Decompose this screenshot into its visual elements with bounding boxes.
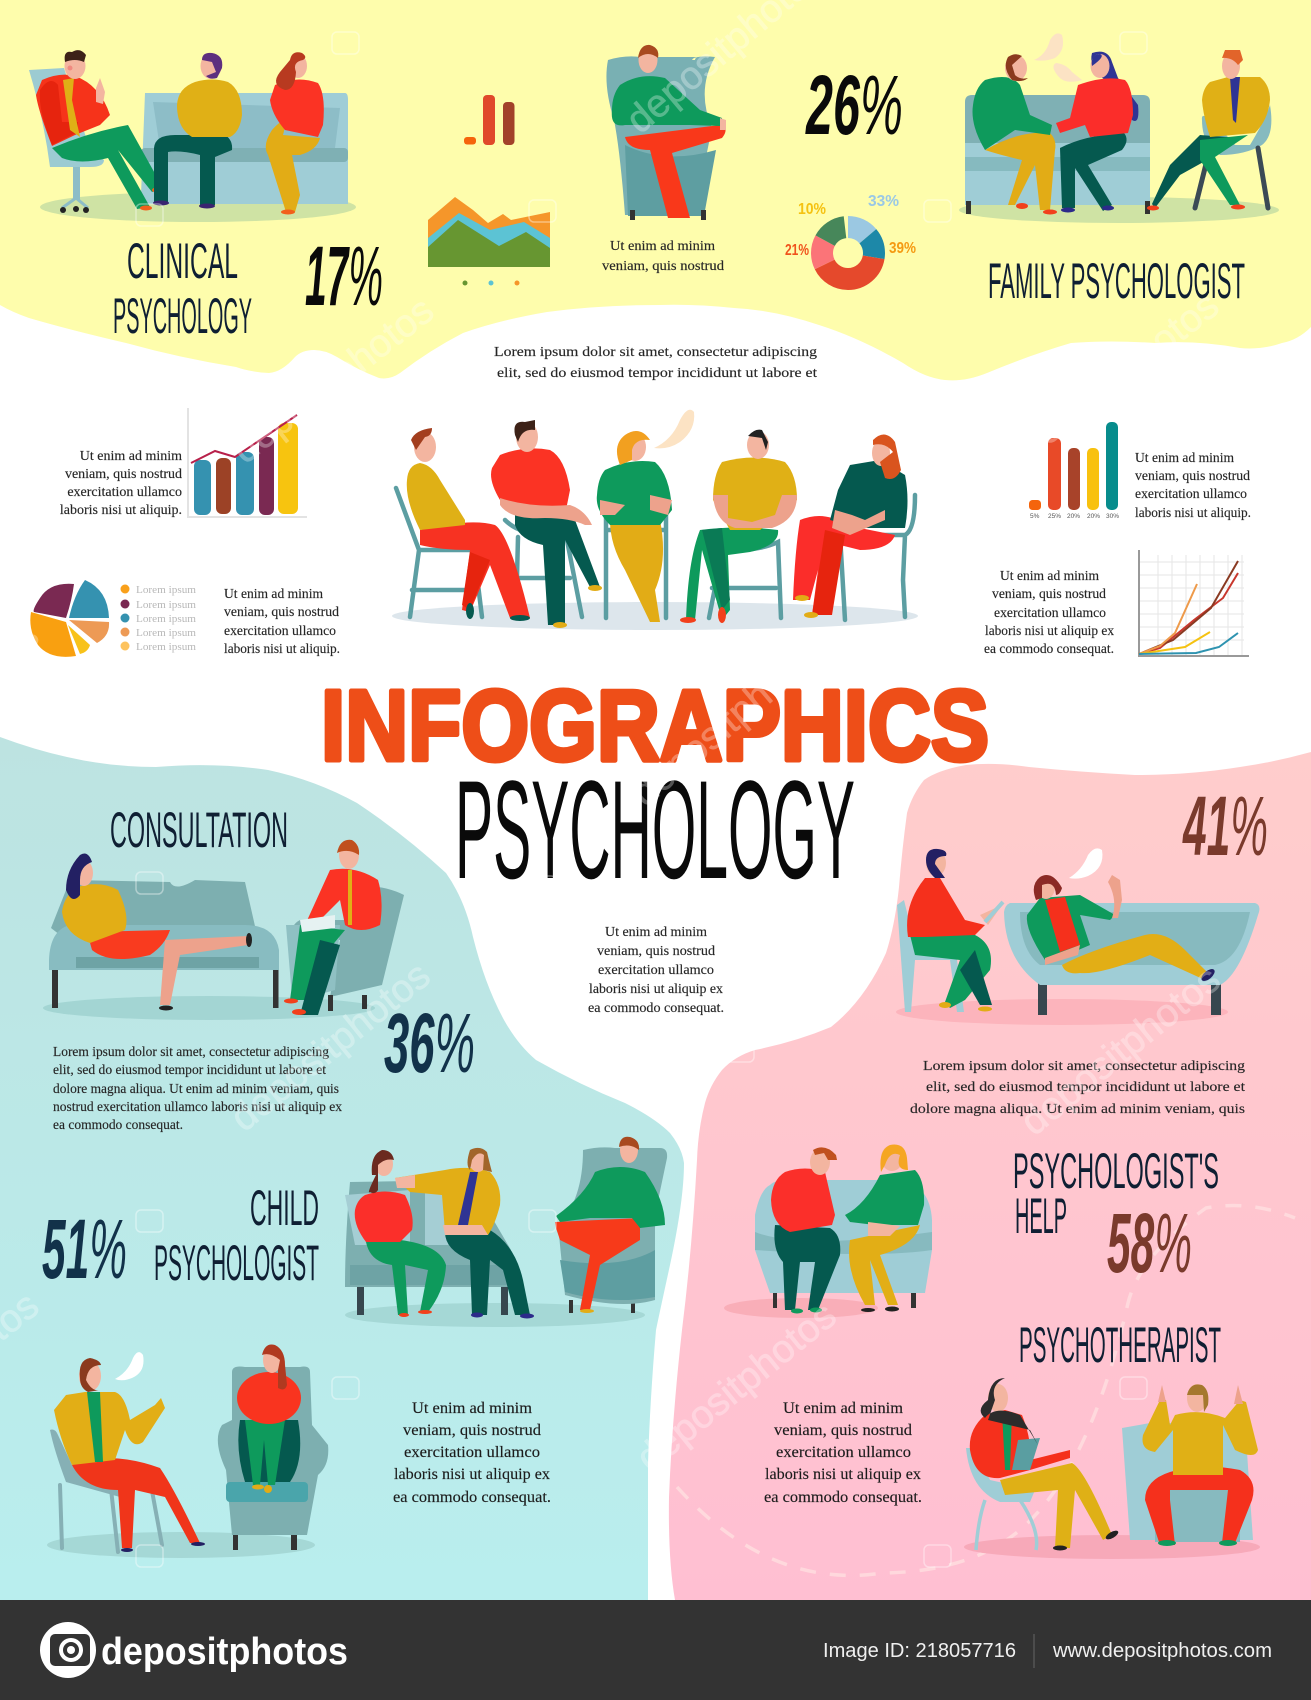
text: line chart caption: ea commodo consequat.	[984, 642, 1114, 657]
figure: man with raised hands	[1142, 1384, 1258, 1546]
icon: speech bubble	[115, 1352, 144, 1380]
text: pie caption: laboris nisi ut aliquip.	[224, 642, 340, 657]
chart: colored bars with percent labels: 5%	[1030, 513, 1040, 520]
figure: man in mustard sweater	[407, 428, 530, 621]
armchair	[286, 885, 404, 1011]
website: www.depositphotos.com	[1052, 1640, 1272, 1662]
figure: bald man in mustard shirt	[680, 430, 797, 623]
text: centre paragraph: laboris nisi ut aliquip ex	[589, 982, 723, 997]
caption: top centre: veniam, quis nostrud	[602, 259, 724, 274]
text: bottom-right paragraph: Ut enim ad minim	[783, 1400, 904, 1417]
text: centre paragraph: ea commodo consequat.	[588, 1001, 724, 1016]
sofa: light blue couch	[1004, 903, 1259, 1015]
watermarks: depositphotos: depositphotos	[1009, 284, 1227, 467]
armchair: grey teal	[218, 1367, 328, 1550]
text: bottom-right paragraph: laboris nisi ut aliquip ex	[765, 1466, 921, 1483]
stat: 26 percent: 26%	[805, 58, 903, 152]
text: pink lorem	[910, 1059, 1245, 1117]
text: pie caption: veniam, quis nostrud	[224, 605, 339, 620]
text: centre paragraph: veniam, quis nostrud	[597, 944, 715, 959]
watermarks: depositphotos: depositphotos	[223, 954, 438, 1140]
stat: 17 percent: 17%	[305, 229, 383, 323]
chart: colored bars with percent labels: 20%	[1087, 513, 1100, 520]
text: bottom-left paragraph: Ut enim ad minim	[412, 1400, 533, 1417]
panel: pink right background	[669, 752, 1311, 1600]
chart: colored bars with percent labels: 20%	[1067, 513, 1080, 520]
heading: child psychologist	[154, 1180, 319, 1291]
watermarks: depositphotos: depositphotos	[1013, 958, 1228, 1144]
chart: area chart	[428, 197, 550, 286]
chart: donut with percentages: 39%	[889, 240, 916, 257]
text: centre paragraph: exercitation ullamco	[598, 963, 714, 978]
scene: group therapy circle	[392, 410, 918, 630]
watermarks: depositphotos: depositphotos	[623, 626, 837, 815]
text: right bar caption: Ut enim ad minim	[1135, 451, 1234, 466]
scene: man in armchair	[606, 45, 726, 220]
chair: blue wooden	[897, 900, 964, 1012]
figure: bearded man gesturing	[54, 1358, 205, 1552]
chart: small bars	[464, 95, 514, 145]
text: pink lorem: dolore magna aliqua. Ut enim ad minim veniam, quis	[910, 1102, 1245, 1117]
scene: psychotherapist session	[964, 1378, 1260, 1559]
scene: therapist and patient on couch	[896, 848, 1259, 1025]
icon: speech bubble	[654, 410, 694, 448]
text: centre paragraph	[588, 925, 724, 1016]
figure: man with hand on chin	[1147, 50, 1270, 210]
legend: pie legend: Lorem ipsum	[136, 613, 196, 625]
text: right bar caption	[1135, 451, 1251, 521]
chair: grey blue	[50, 1430, 162, 1552]
text: consultation lorem: elit, sed do eiusmod tempor incididunt ut labore et	[53, 1063, 326, 1078]
text: line chart caption	[984, 569, 1114, 657]
text: pie caption: Ut enim ad minim	[224, 587, 323, 602]
text: bottom-left paragraph: laboris nisi ut aliquip ex	[394, 1466, 550, 1483]
logo: camera in circle	[40, 1622, 96, 1678]
stat: 41 percent: 41%	[1182, 779, 1268, 873]
figure: man in green	[612, 45, 726, 218]
chart: donut with percentages: 21%	[785, 242, 809, 259]
text: left bar chart caption: veniam, quis nostrud	[65, 467, 182, 482]
watermarks: depositphotos: depositphotos	[629, 1294, 844, 1480]
scene: consultation	[43, 840, 404, 1020]
text: pink lorem: Lorem ipsum dolor sit amet, consectetur adipiscing	[923, 1059, 1245, 1074]
chart: bars with rising line	[188, 408, 307, 517]
legend: pie legend: Lorem ipsum	[136, 599, 196, 611]
text: pink lorem: elit, sed do eiusmod tempor incididunt ut labore et	[926, 1080, 1245, 1095]
icons: speech bubbles	[1034, 33, 1082, 82]
figure: troubled man	[771, 1147, 840, 1314]
figure: bearded man in yellow	[153, 53, 242, 209]
text: right bar caption: laboris nisi ut aliquip.	[1135, 506, 1251, 521]
text: consultation lorem: dolore magna aliqua. Ut enim ad minim veniam, quis	[53, 1082, 339, 1097]
caption: top centre	[602, 239, 724, 274]
text: PSYCHOLOGIST	[154, 1235, 319, 1291]
text: line chart caption: veniam, quis nostrud	[992, 587, 1106, 602]
figure: woman in dark green	[793, 434, 908, 618]
text: centre paragraph: Ut enim ad minim	[605, 925, 707, 940]
stat: 36 percent: 36%	[384, 996, 475, 1090]
figure: woman hugging herself	[237, 1344, 301, 1493]
logo text: depositphotos	[101, 1631, 348, 1673]
text: line chart caption: exercitation ullamco	[994, 606, 1106, 621]
chairs	[396, 488, 915, 620]
armchair	[606, 56, 715, 215]
chart: colored bars with percent labels	[1029, 422, 1119, 520]
text: left bar chart caption: laboris nisi ut aliquip.	[60, 503, 182, 518]
chair: round blue	[1195, 105, 1271, 208]
text: right bar caption: veniam, quis nostrud	[1135, 469, 1250, 484]
figure: therapist with glasses	[36, 50, 166, 211]
legend: pie legend: Lorem ipsum	[136, 641, 196, 653]
watermarks: depositphotos: depositphotos	[224, 289, 442, 472]
text: consultation lorem: Lorem ipsum dolor sit amet, consectetur adipiscing	[53, 1045, 329, 1060]
figure: reclining patient	[1027, 875, 1217, 983]
figure: man in red sweater	[491, 420, 602, 628]
figure: comforting woman	[845, 1145, 924, 1312]
figure: therapist woman with clipboard	[970, 1378, 1120, 1550]
scene: family psychologist	[959, 33, 1279, 223]
figure: reclining woman	[62, 854, 252, 1010]
text: line chart caption: laboris nisi ut aliquip ex	[985, 624, 1114, 639]
text: pie caption: exercitation ullamco	[224, 624, 336, 639]
sofa: light blue	[755, 1180, 932, 1308]
scene: child psychologist	[345, 1137, 667, 1327]
legend: pie legend: Lorem ipsum	[136, 584, 196, 596]
text: bottom-right paragraph: exercitation ullamco	[776, 1444, 911, 1461]
text: bottom-right paragraph: ea commodo consequat.	[764, 1489, 922, 1506]
text: CONSULTATION	[110, 802, 288, 858]
text: left bar chart caption: Ut enim ad minim	[80, 449, 182, 464]
title: infographics: INFOGRAPHICS	[321, 670, 989, 782]
text: consultation lorem: nostrud exercitation ullamco laboris nisi ut aliquip ex	[53, 1100, 342, 1115]
figure: bearded therapist	[907, 849, 1003, 1012]
figure: therapist with notebook	[284, 840, 382, 1015]
text: bottom-left paragraph: ea commodo consequat.	[393, 1489, 551, 1506]
text: line chart caption: Ut enim ad minim	[1000, 569, 1099, 584]
chart: donut with percentages: 33%	[868, 193, 899, 210]
panel: teal left background	[0, 737, 684, 1600]
chart: colored bars with percent labels: 30%	[1106, 513, 1119, 520]
text: intro lorem	[494, 345, 817, 381]
chair: office chair	[29, 68, 104, 213]
heading: clinical psychology	[113, 233, 252, 344]
heading: psychologist's help: HELP	[1015, 1188, 1067, 1244]
text: pie caption	[224, 587, 340, 657]
panel: yellow top background	[0, 0, 1311, 380]
text: PSYCHOLOGY	[113, 288, 252, 344]
armchair: tall light blue	[1122, 1423, 1253, 1542]
caption: top centre: Ut enim ad minim	[610, 239, 715, 254]
text: consultation lorem: ea commodo consequat.	[53, 1118, 183, 1133]
icon: speech bubble	[1069, 848, 1102, 879]
stat: 58 percent: 58%	[1107, 1196, 1192, 1290]
figure: man in green in armchair	[555, 1137, 665, 1313]
figure: child in red	[355, 1150, 446, 1317]
text: bottom-right paragraph	[764, 1400, 922, 1506]
figure: bearded man in green	[972, 54, 1057, 214]
watermarks: camera stamps	[136, 32, 1147, 1567]
chair: light blue round	[966, 1448, 1037, 1550]
text: right bar caption: exercitation ullamco	[1135, 487, 1247, 502]
scene: man talking and woman in armchair	[47, 1344, 328, 1558]
chart: donut with percentages: 10%	[798, 201, 826, 218]
chart: exploded pie	[30, 580, 109, 657]
armchair: right	[558, 1147, 667, 1313]
decoration: dashed arc on pink panel	[677, 1206, 1295, 1575]
chart: colored bars with percent labels: 25%	[1048, 513, 1061, 520]
legend: pie legend: Lorem ipsum	[136, 627, 196, 639]
figure: woman in red with navy hair	[1056, 52, 1138, 213]
sofa: chair for parent and child	[345, 1180, 511, 1315]
text: intro lorem: Lorem ipsum dolor sit amet, consectetur adipiscing	[494, 345, 817, 360]
figure: woman in green	[597, 431, 672, 622]
image id: Image ID: 218057716	[823, 1640, 1016, 1662]
text: left bar chart caption: exercitation ullamco	[67, 485, 182, 500]
footer bar	[0, 1600, 1311, 1700]
text: bottom-left paragraph: veniam, quis nostrud	[403, 1422, 541, 1439]
text: bottom-left paragraph: exercitation ullamco	[404, 1444, 540, 1461]
text: CHILD	[250, 1180, 319, 1236]
scene: clinical psychology group on sofa	[29, 50, 356, 222]
heading: clinical psychology: CLINICAL	[127, 233, 238, 289]
legend: pie legend	[120, 584, 196, 653]
chart: line chart with grid	[1139, 550, 1249, 656]
heading: psychologist's help	[1013, 1143, 1219, 1244]
text: intro lorem: elit, sed do eiusmod tempor incididunt ut labore et	[497, 366, 817, 381]
sofa: teal couch	[49, 880, 279, 1008]
text: consultation lorem	[53, 1045, 342, 1133]
text: left bar chart caption	[60, 449, 182, 518]
text: bottom-left paragraph	[393, 1400, 551, 1506]
figure: parent with arm around child	[395, 1148, 534, 1318]
chart: donut with percentages	[785, 193, 916, 279]
text: bottom-right paragraph: veniam, quis nostrud	[774, 1422, 912, 1439]
figure: woman in red	[266, 52, 324, 214]
scene: psychologist's help couple	[724, 1145, 932, 1318]
stat: 51 percent: 51%	[42, 1202, 127, 1296]
